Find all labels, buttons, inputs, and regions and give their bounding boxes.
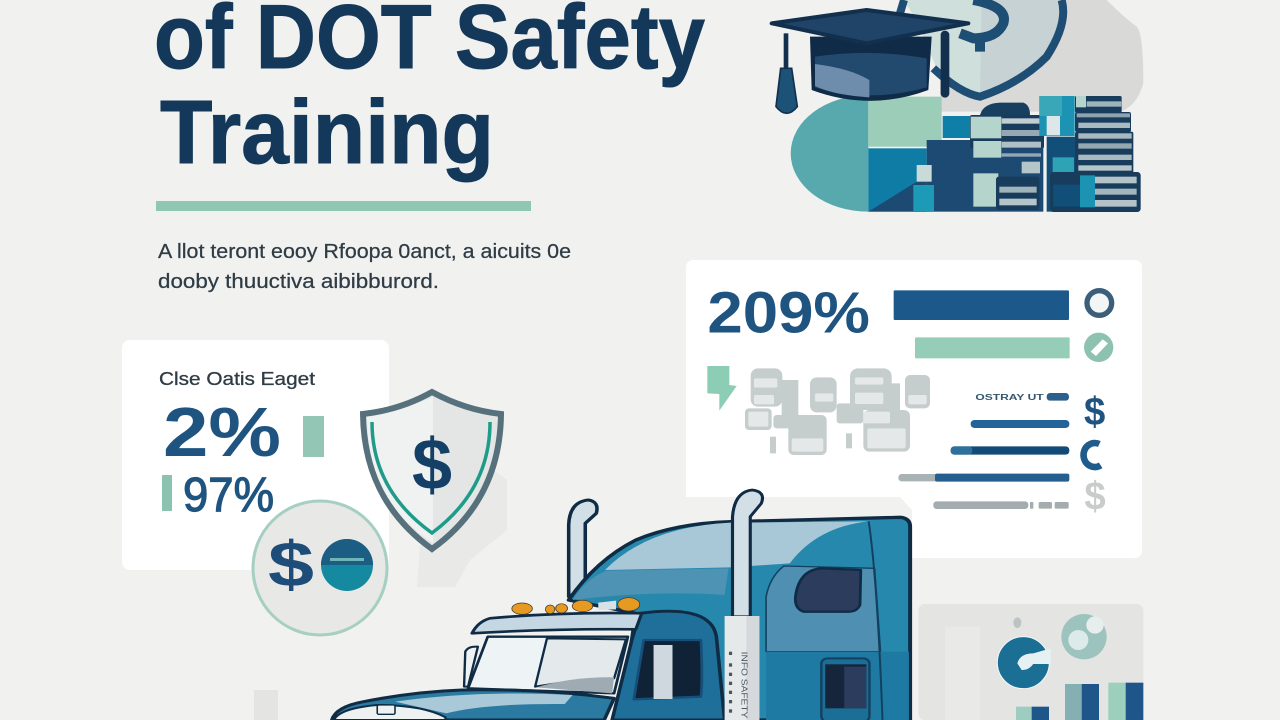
ring icon mint — [1084, 333, 1113, 362]
pale column — [945, 627, 980, 720]
intro text — [158, 241, 571, 293]
side mirror — [464, 647, 478, 687]
donut icon teal — [997, 637, 1051, 689]
grey seats cluster — [745, 368, 930, 455]
sleeper door window — [821, 658, 869, 720]
bar pair medium — [1065, 684, 1099, 720]
mint marker — [303, 416, 324, 457]
sleeper cab — [569, 517, 910, 720]
rear exhaust stack — [569, 500, 597, 597]
sleeper vertical seam — [869, 521, 883, 720]
panel: bottom right chart — [918, 604, 1143, 720]
front exhaust stack — [733, 490, 763, 617]
seat highlights — [748, 377, 927, 452]
stat: 2%: 2% — [163, 393, 281, 471]
bar 3 — [951, 446, 1069, 455]
icon: coin circle — [253, 501, 387, 635]
cab door window — [634, 640, 702, 699]
hood ornament — [377, 705, 395, 714]
stat: 209%: 209% — [707, 281, 870, 346]
dot — [1013, 617, 1021, 628]
graduation cap — [772, 10, 968, 113]
grey backdrop — [940, 0, 1143, 112]
stat: 97%: 97% — [183, 469, 274, 522]
lower side panel — [766, 652, 909, 720]
side window — [795, 568, 861, 612]
title — [154, 0, 705, 183]
crescent icon — [1084, 443, 1101, 467]
exhaust heat shield — [725, 616, 759, 720]
windshield — [468, 637, 628, 693]
bar pair short — [1016, 707, 1049, 720]
pie icon — [1061, 614, 1107, 659]
cab marker lights — [512, 598, 640, 614]
small labelled bar: OSTRAY UT — [975, 393, 1044, 402]
bar: mint — [915, 337, 1070, 358]
bar 2 — [971, 420, 1069, 428]
mint marker — [162, 475, 172, 511]
shield with dollar sign — [900, 0, 1063, 98]
hood — [332, 690, 614, 720]
bar: navy — [894, 290, 1069, 320]
bar 5 — [933, 501, 1069, 509]
sleeper side panel — [766, 566, 881, 652]
title underline — [156, 201, 531, 211]
icon: shield with dollar — [363, 392, 501, 549]
left book stack — [913, 103, 1044, 212]
lightning icon — [707, 366, 737, 411]
bar pair tall — [1108, 683, 1143, 720]
panel: left stats card — [122, 340, 389, 570]
right book stack — [1039, 96, 1141, 212]
bar 4 — [898, 474, 1069, 482]
intro text: A llot teront eooy Rfoopa 0anct, a aicuits 0e — [158, 241, 571, 263]
intro text: dooby thuuctiva aibibburord. — [158, 271, 439, 293]
exhaust heat shield: INFO SAFETY — [739, 652, 749, 719]
hood highlight — [395, 693, 573, 713]
panel: right stats card — [686, 260, 1142, 558]
radiator top — [334, 705, 446, 720]
sleeper roof highlight — [605, 521, 869, 570]
cab body — [612, 611, 725, 720]
icon: coin circle: $ — [268, 528, 314, 600]
faint grey stub — [254, 690, 278, 720]
icon: shield shadow — [417, 460, 507, 587]
roof trim — [598, 601, 616, 610]
pie shape — [791, 95, 942, 212]
dollar icon grey: $ — [1084, 474, 1106, 518]
hero illustration: graduation cap, shield and books — [772, 0, 1143, 212]
ring icon — [1087, 291, 1112, 315]
card heading: Clse Oatis Eaget — [159, 369, 315, 389]
dollar icon navy: $ — [1084, 390, 1105, 434]
fairing mid band — [573, 568, 729, 600]
icon: shield with dollar: $ — [412, 425, 452, 505]
title: Training — [160, 83, 494, 183]
visor — [472, 613, 642, 633]
small labelled bar — [975, 393, 1069, 402]
truck — [332, 490, 910, 720]
